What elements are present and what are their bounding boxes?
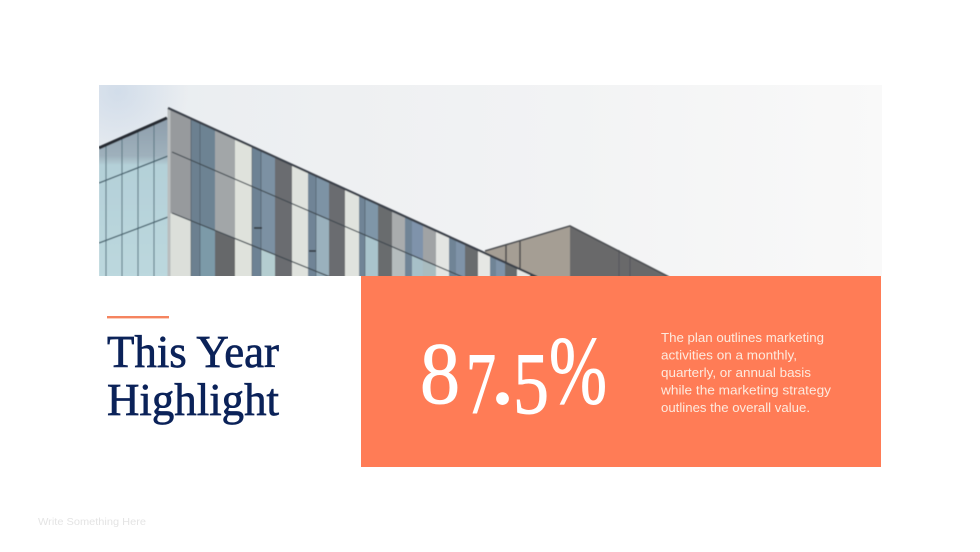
footer placeholder text: Write Something Here [38, 516, 146, 528]
photo: office building against the sky [99, 85, 790, 276]
big statistic: 87.5%: 5 [513, 336, 549, 433]
heading: This Year Highlight: Highlight [107, 374, 279, 425]
body text: plan description: while the marketing strategy [660, 384, 832, 398]
big statistic: 87.5%: % [549, 317, 607, 425]
body text: plan description: The plan outlines marketing [661, 331, 824, 345]
body text: plan description: activities on a monthly, [661, 348, 797, 362]
big statistic: 87.5%: 7 [466, 336, 496, 433]
heading: This Year Highlight: This Year [107, 326, 279, 377]
main facade of building [166, 106, 538, 276]
body text: plan description: outlines the overall value. [661, 401, 810, 415]
accent line above heading [107, 316, 169, 318]
big statistic: 87.5%: 8 [420, 326, 460, 423]
rear building [485, 226, 669, 277]
body text: plan description: quarterly, or annual basis [661, 366, 811, 380]
big statistic: 87.5%: . [490, 314, 515, 425]
left wing of building [99, 117, 170, 277]
panel: orange highlight block [361, 276, 881, 467]
